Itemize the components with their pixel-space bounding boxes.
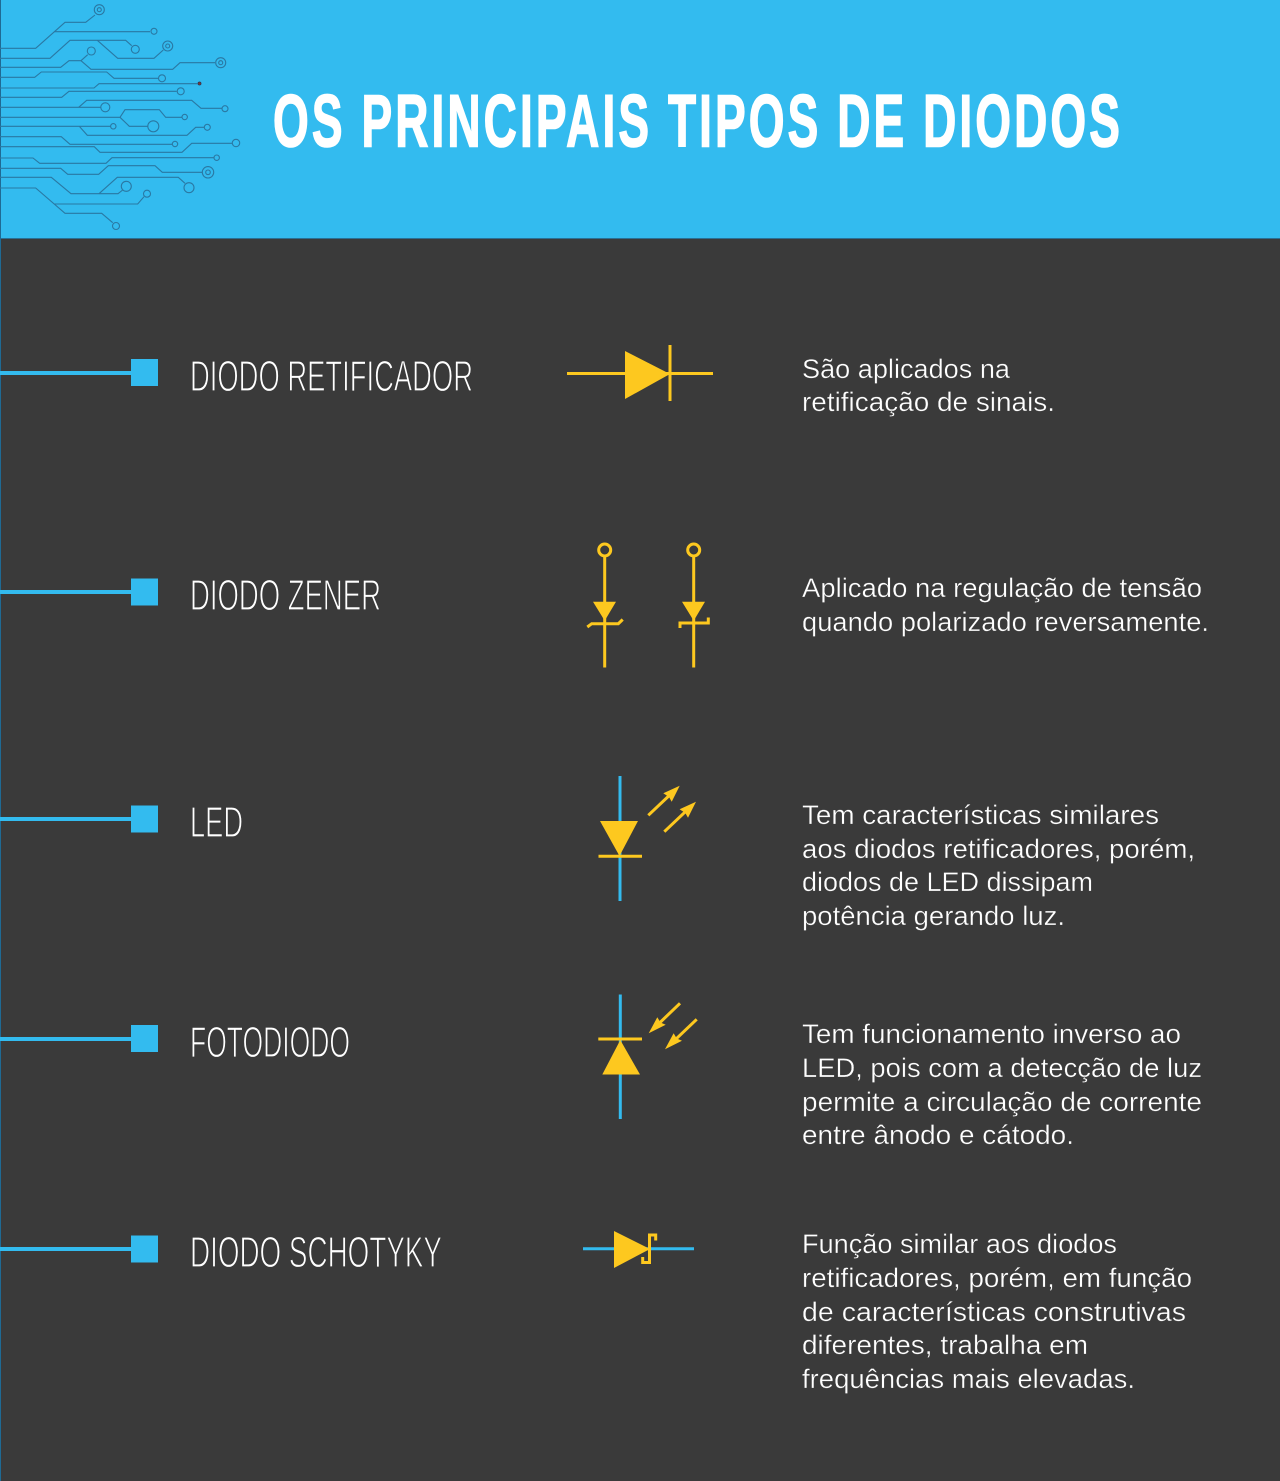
description: permite a circulação de corrente xyxy=(802,1087,1202,1117)
heading: LED xyxy=(190,798,243,847)
row: diodo zener xyxy=(0,544,1209,668)
row: diodo schotyky xyxy=(0,1228,1192,1394)
description: aos diodos retificadores, porém, xyxy=(802,834,1195,864)
description: Aplicado na regulação de tensão xyxy=(802,573,1202,603)
icon: schottky diode symbol xyxy=(583,1231,694,1268)
connector line and marker xyxy=(0,359,158,386)
heading: FOTODIODO xyxy=(190,1018,350,1067)
heading: DIODO ZENER xyxy=(190,571,381,620)
description: Tem funcionamento inverso ao xyxy=(802,1019,1181,1049)
icon: photodiode symbol xyxy=(598,994,697,1119)
description: entre ânodo e cátodo. xyxy=(802,1120,1074,1150)
description: retificação de sinais. xyxy=(802,387,1055,417)
heading: DIODO SCHOTYKY xyxy=(190,1228,442,1277)
header banner xyxy=(0,0,1280,239)
description xyxy=(802,1229,1192,1394)
row: diodo retificador xyxy=(0,345,1055,417)
description: Função similar aos diodos xyxy=(802,1229,1117,1259)
connector line and marker xyxy=(0,806,158,832)
description xyxy=(802,354,1055,417)
row: fotodiodo xyxy=(0,994,1202,1150)
description: retificadores, porém, em função xyxy=(802,1263,1192,1293)
description: Tem características similares xyxy=(802,800,1159,830)
heading: DIODO RETIFICADOR xyxy=(190,352,473,401)
description: diodos de LED dissipam xyxy=(802,867,1093,897)
description: diferentes, trabalha em xyxy=(802,1330,1088,1360)
description: de características construtivas xyxy=(802,1297,1186,1327)
icon: LED symbol xyxy=(598,776,696,901)
description xyxy=(802,573,1209,637)
description xyxy=(802,800,1195,931)
description: quando polarizado reversamente. xyxy=(802,607,1209,637)
description: frequências mais elevadas. xyxy=(802,1364,1135,1394)
description: potência gerando luz. xyxy=(802,901,1065,931)
row: LED xyxy=(0,776,1195,931)
connector line and marker xyxy=(0,1236,158,1262)
icon: rectifier diode symbol xyxy=(567,345,713,401)
icon: circuit board traces xyxy=(0,5,240,230)
description xyxy=(802,1019,1202,1150)
description: São aplicados na xyxy=(802,354,1011,384)
icon: zener diode symbols xyxy=(587,544,708,668)
connector line and marker xyxy=(0,578,158,606)
description: LED, pois com a detecção de luz xyxy=(802,1053,1202,1083)
connector line and marker xyxy=(0,1025,158,1052)
